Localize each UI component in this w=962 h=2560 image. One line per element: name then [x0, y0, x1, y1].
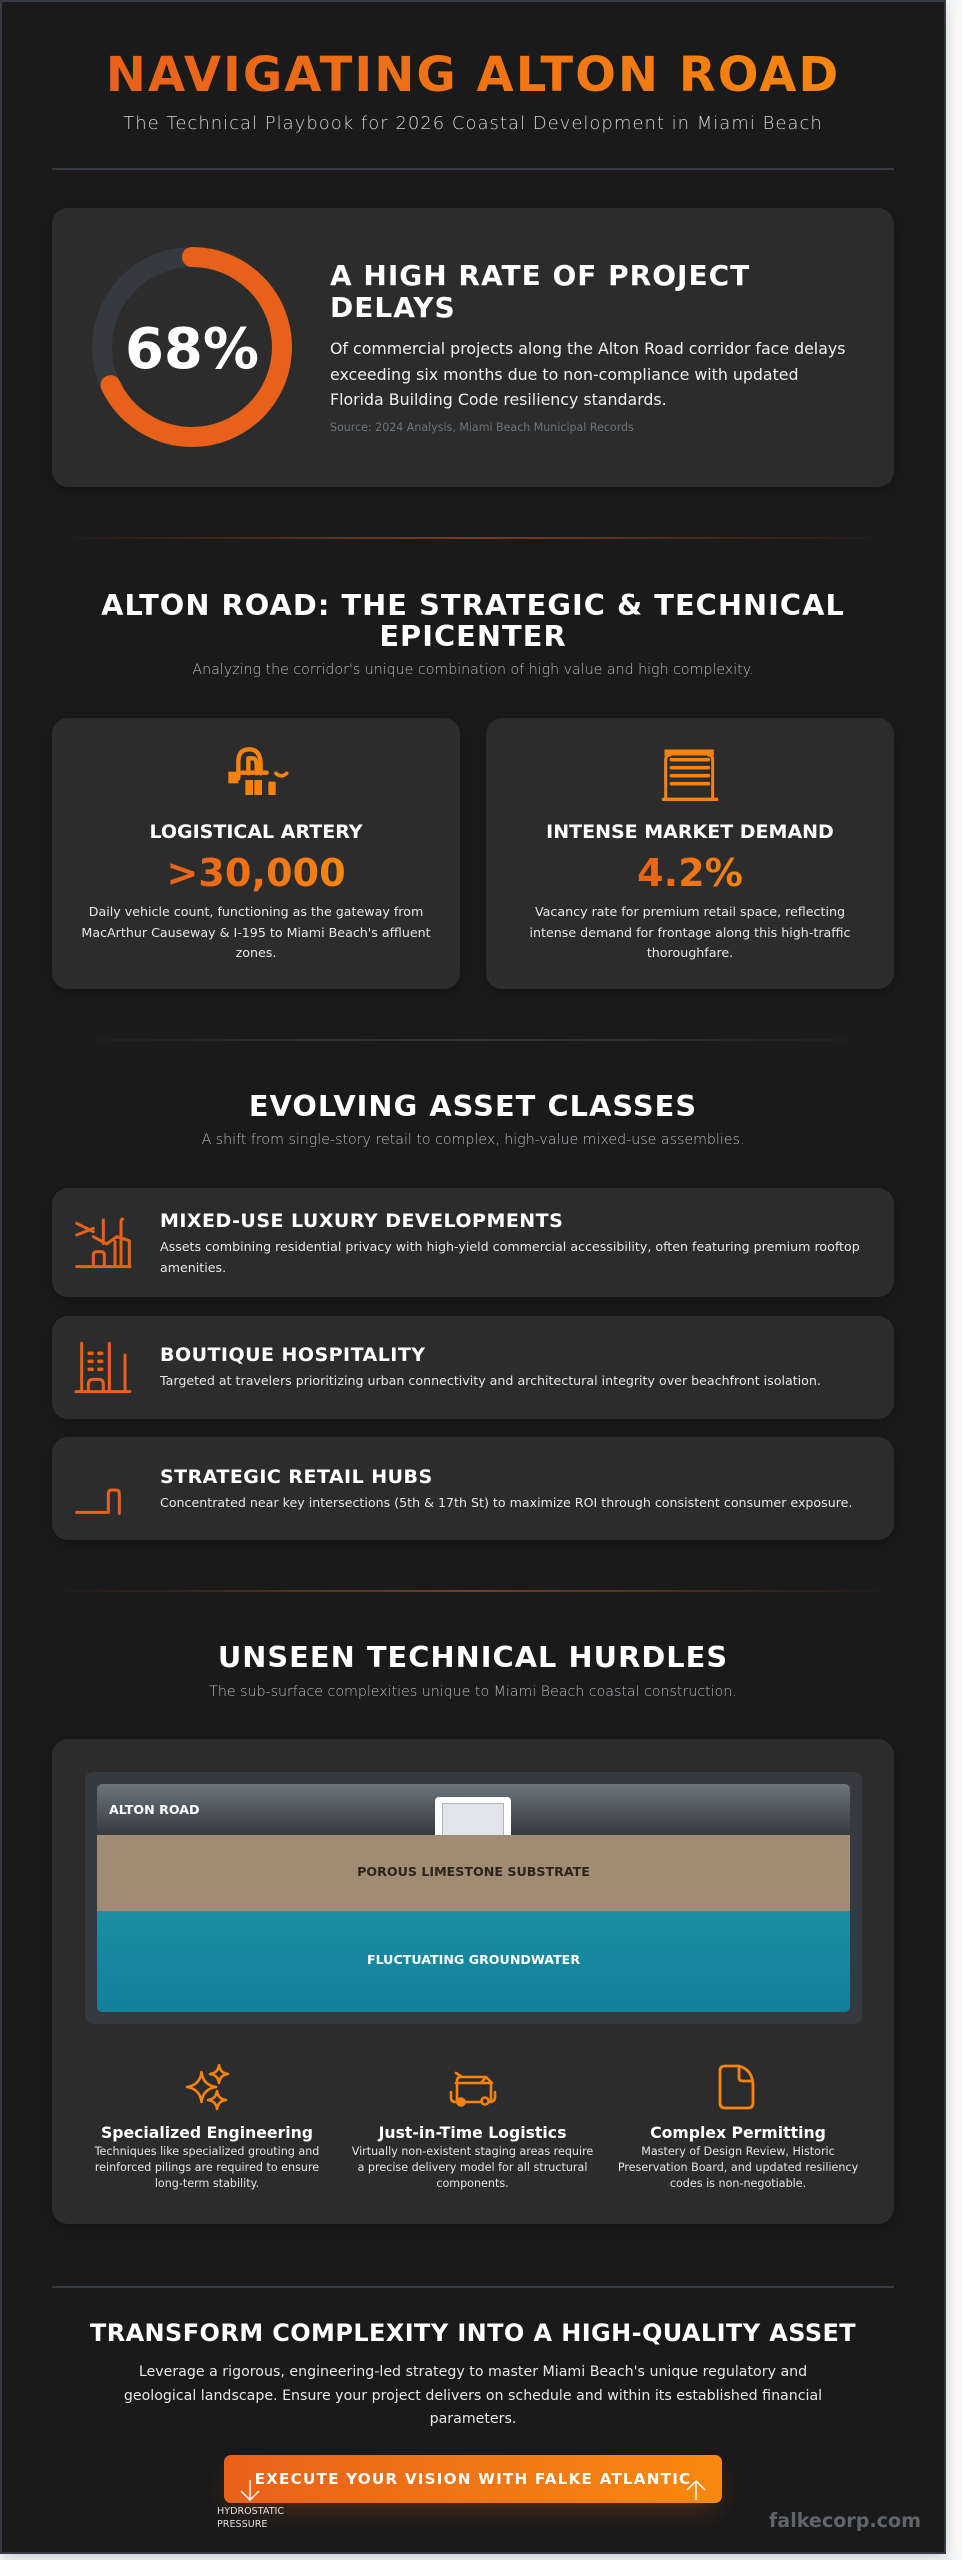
label: limestone: POROUS LIMESTONE SUBSTRATE [357, 1864, 590, 1879]
section subheading: asset classes: A shift from single-story retail to complex, high-value mixed-use assemblies. [202, 1132, 744, 1148]
description: market demand: Vacancy rate for premium retail space, reflecting [535, 904, 845, 919]
description: logistical artery [81, 904, 431, 960]
building [435, 1797, 511, 1835]
heading: boutique hospitality: BOUTIQUE HOSPITALITY [160, 1344, 425, 1366]
button: call to action [224, 2455, 722, 2503]
panel: mixed-use [52, 1188, 894, 1297]
paragraph: call to action: geological landscape. Ensure your project delivers on schedule and within its established financial [124, 2388, 822, 2404]
description: just-in-time logistics [352, 2145, 593, 2190]
arrow: up [686, 2480, 706, 2500]
section heading: epicenter [101, 588, 845, 653]
description: boutique hospitality: Targeted at travelers prioritizing urban connectivity and architectural integrity over beachfront isolation. [160, 1373, 821, 1388]
source note: Source: 2024 Analysis, Miami Beach Municipal Records [330, 421, 634, 434]
description: mixed-use: amenities. [160, 1260, 226, 1274]
section heading: hurdles: UNSEEN TECHNICAL HURDLES [218, 1640, 728, 1674]
column: complex permitting [618, 2064, 858, 2190]
subtitle: The Technical Playbook for 2026 Coastal Development in Miami Beach [123, 113, 823, 134]
layer: limestone [97, 1835, 850, 1911]
description: mixed-use [160, 1239, 860, 1274]
section subheading: hurdles: The sub-surface complexities unique to Miami Beach coastal construction. [209, 1684, 737, 1700]
description: specialized engineering [94, 2145, 319, 2190]
heading: retail hubs: STRATEGIC RETAIL HUBS [160, 1466, 433, 1488]
paragraph: call to action [124, 2364, 822, 2427]
description: logistical artery: Daily vehicle count, functioning as the gateway from [89, 904, 423, 919]
icon: sparkles [186, 2064, 230, 2110]
heading: logistical artery: LOGISTICAL ARTERY [149, 821, 363, 843]
layer: road [97, 1784, 850, 1835]
description: delays: exceeding six months due to non-compliance with updated [330, 365, 799, 384]
description: mixed-use: Assets combining residential privacy with high-yield commercial accessibility, often featuring premium rooftop [160, 1239, 860, 1254]
description: market demand [530, 904, 850, 960]
panel: project delays [52, 208, 894, 487]
description: complex permitting: Mastery of Design Review, Historic [641, 2145, 835, 2158]
heading: delays [330, 259, 750, 324]
section heading: asset classes: EVOLVING ASSET CLASSES [249, 1089, 697, 1123]
label: groundwater: FLUCTUATING GROUNDWATER [367, 1952, 580, 1967]
donut chart: 68% [92, 247, 292, 447]
description: specialized engineering: long-term stability. [155, 2177, 259, 2190]
description: market demand: intense demand for frontage along this high-traffic [530, 925, 850, 940]
section heading: epicenter: ALTON ROAD: THE STRATEGIC & TECHNICAL [101, 588, 845, 622]
footer brand: falkecorp.com [769, 2509, 921, 2532]
description: complex permitting: codes is non-negotiable. [670, 2177, 806, 2190]
heading: mixed-use: MIXED-USE LUXURY DEVELOPMENTS [160, 1210, 563, 1232]
panel: technical hurdles [52, 1739, 894, 2224]
panel: boutique hospitality [52, 1316, 894, 1419]
icon: mixed-use [75, 1218, 132, 1268]
label: Alton Road: ALTON ROAD [109, 1802, 200, 1817]
description: delays: Of commercial projects along the Alton Road corridor face delays [330, 339, 845, 358]
title: NAVIGATING ALTON ROAD [106, 47, 840, 103]
heading: just-in-time logistics: Just-in-Time Logistics [379, 2123, 566, 2142]
section subheading: epicenter: Analyzing the corridor's unique combination of high value and high complexity. [192, 662, 754, 678]
column: just-in-time logistics [352, 2072, 593, 2190]
stat: vehicles: >30,000 [166, 852, 346, 896]
description: just-in-time logistics: Virtually non-existent staging areas require [352, 2145, 593, 2158]
section heading: epicenter: EPICENTER [379, 619, 567, 653]
panel: market demand [486, 718, 894, 989]
label: hydrostatic pressure [217, 2506, 284, 2530]
description: specialized engineering: reinforced pilings are required to ensure [95, 2161, 319, 2174]
icon: document [718, 2064, 754, 2110]
icon: delivery truck [450, 2072, 496, 2107]
panel: retail hubs [52, 1437, 894, 1540]
label: hydrostatic pressure: PRESSURE [217, 2518, 267, 2530]
arrow: down [240, 2480, 260, 2501]
heading: call to action: TRANSFORM COMPLEXITY INTO A HIGH-QUALITY ASSET [90, 2319, 856, 2347]
description: retail hubs: Concentrated near key intersections (5th & 17th St) to maximize ROI through consistent consumer exposure. [160, 1495, 852, 1510]
icon: storefront shutter [662, 750, 718, 801]
diagram: ground cross-section [85, 1772, 862, 2024]
panel: logistical artery [52, 718, 460, 989]
button: call to action: EXECUTE YOUR VISION WITH FALKE ATLANTIC [255, 2470, 691, 2488]
description: complex permitting [618, 2145, 858, 2190]
heading: specialized engineering: Specialized Engineering [101, 2123, 313, 2142]
icon: retail hub [75, 1488, 121, 1515]
label: hydrostatic pressure: HYDROSTATIC [217, 2506, 284, 2517]
description: delays: Florida Building Code resiliency standards. [330, 390, 667, 409]
donut chart: 68%: 68% [125, 317, 259, 382]
description: market demand: thoroughfare. [647, 945, 733, 960]
description: delays [330, 339, 845, 409]
heading: complex permitting: Complex Permitting [650, 2123, 826, 2142]
icon: hotel [74, 1342, 132, 1394]
heading: delays: A HIGH RATE OF PROJECT [330, 259, 750, 292]
description: logistical artery: zones. [236, 945, 276, 960]
stat: vacancy: 4.2% [637, 852, 743, 896]
description: just-in-time logistics: a precise delivery model for all structural [358, 2161, 587, 2174]
description: complex permitting: Preservation Board, and updated resiliency [618, 2161, 858, 2174]
heading: market demand: INTENSE MARKET DEMAND [546, 821, 834, 843]
description: logistical artery: MacArthur Causeway & I-195 to Miami Beach's affluent [81, 925, 431, 940]
layer: groundwater [97, 1911, 850, 2012]
heading: delays: DELAYS [330, 290, 456, 324]
paragraph: call to action: Leverage a rigorous, engineering-led strategy to master Miami Beach's unique regulatory and [139, 2364, 807, 2380]
description: specialized engineering: Techniques like specialized grouting and [95, 2145, 319, 2158]
column: specialized engineering [94, 2064, 319, 2190]
paragraph: call to action: parameters. [430, 2411, 516, 2427]
icon: logistics [228, 747, 289, 795]
description: just-in-time logistics: components. [436, 2177, 509, 2190]
